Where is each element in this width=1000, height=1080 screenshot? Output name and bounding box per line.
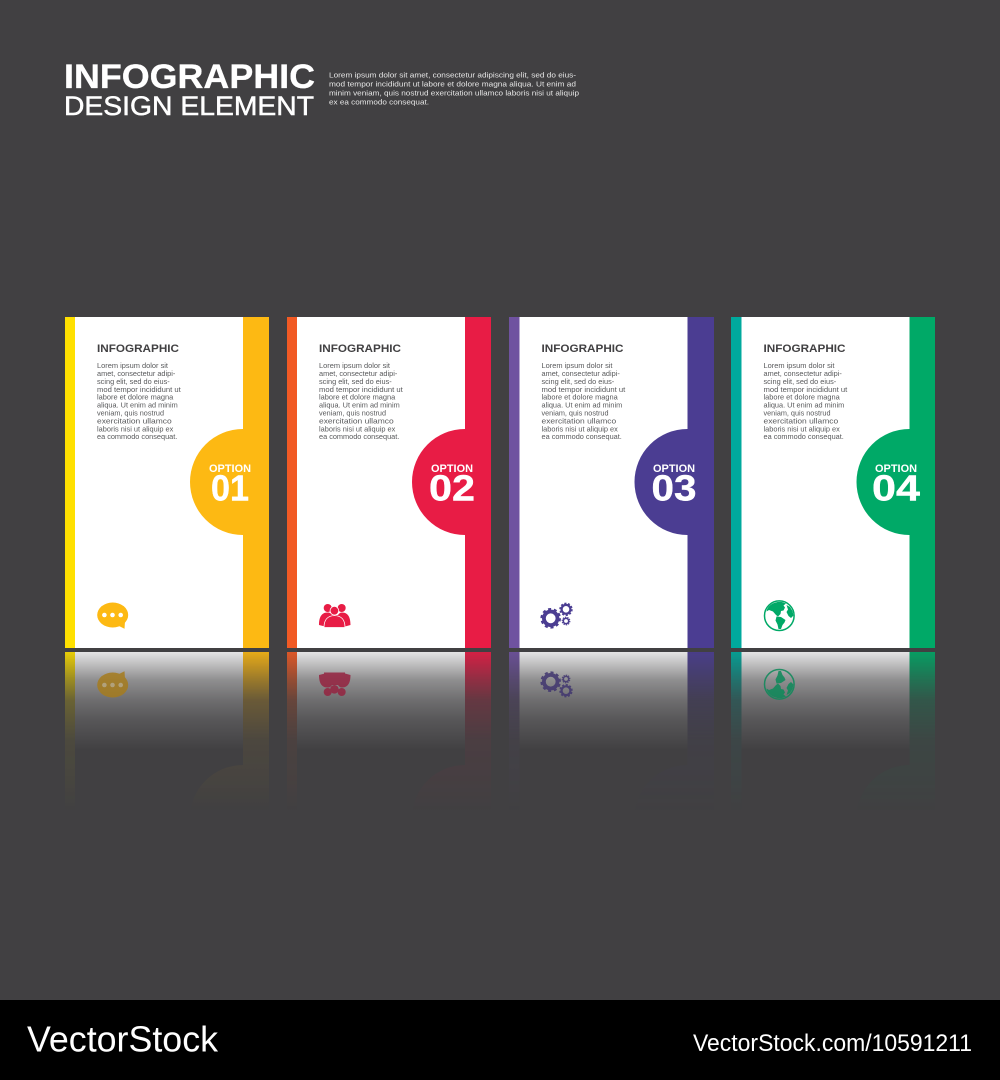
badge: option 02 — [412, 429, 475, 535]
text block: exercitation ullamco — [97, 417, 172, 425]
heading: INFOGRAPHIC — [764, 343, 846, 355]
text block: laboris nisi ut aliquip ex — [319, 425, 396, 433]
icon: globe — [764, 601, 794, 630]
icon: gears — [541, 603, 572, 628]
text block: laboris nisi ut aliquip ex — [542, 425, 618, 433]
text block: mod tempor incididunt ut — [764, 386, 847, 394]
reflections — [65, 652, 935, 758]
intro text block — [329, 70, 579, 106]
text block: aliqua. Ut enim ad minim — [542, 402, 622, 410]
badge: option 04: OPTION — [875, 463, 917, 475]
reflection: option 01 — [65, 652, 269, 758]
heading: INFOGRAPHIC — [97, 343, 179, 355]
text block: veniam, quis nostrud — [319, 410, 386, 418]
heading: INFOGRAPHIC — [542, 343, 624, 355]
title — [64, 58, 315, 121]
text block: aliqua. Ut enim ad minim — [764, 402, 844, 410]
reflection: option 02 — [287, 652, 491, 752]
text block: scing elit, sed do eius- — [97, 378, 170, 386]
text block: aliqua. Ut enim ad minim — [319, 402, 400, 410]
reflected globe — [764, 670, 794, 699]
text block: Lorem ipsum dolor sit — [542, 362, 613, 370]
text block: ea commodo consequat. — [319, 433, 399, 441]
intro text block: Lorem ipsum dolor sit amet, consectetur adipiscing elit, sed do eius- — [329, 70, 577, 80]
text block: veniam, quis nostrud — [542, 410, 609, 418]
badge: option 01: OPTION — [209, 463, 251, 475]
reflected people group — [319, 672, 350, 696]
panel: option 02 — [287, 317, 491, 648]
text block — [97, 362, 181, 441]
reflection: white floor sheen — [75, 652, 910, 752]
panel: option 01 — [65, 317, 269, 648]
intro text block: mod tempor incididunt ut labore et dolore magna aliqua. Ut enim ad — [329, 80, 576, 88]
text block: laboris nisi ut aliquip ex — [97, 425, 174, 433]
text block: scing elit, sed do eius- — [764, 378, 837, 386]
text block: Lorem ipsum dolor sit — [97, 362, 168, 370]
icon: people group — [319, 604, 350, 628]
text block: ea commodo consequat. — [764, 433, 844, 441]
text block: amet, consectetur adipi- — [97, 370, 176, 378]
text block: Lorem ipsum dolor sit — [319, 362, 390, 370]
text block: exercitation ullamco — [542, 417, 616, 425]
badge: option 01 — [190, 429, 251, 535]
reflection: option 03 — [509, 652, 714, 731]
text block: exercitation ullamco — [319, 417, 394, 425]
title: INFOGRAPHIC — [64, 58, 315, 96]
title: DESIGN ELEMENT — [64, 91, 314, 121]
badge: option 03: 03 — [652, 468, 696, 508]
text block: laboris nisi ut aliquip ex — [764, 425, 840, 433]
text block: mod tempor incididunt ut — [319, 386, 403, 394]
reflected gears — [541, 672, 572, 697]
text block: scing elit, sed do eius- — [542, 378, 615, 386]
text block: labore et dolore magna — [97, 394, 173, 402]
badge: option 04 — [856, 429, 920, 535]
panel: option 04 — [731, 317, 935, 648]
panel: option 03 — [509, 317, 714, 648]
intro text block: ex ea commodo consequat. — [329, 98, 429, 106]
text block: exercitation ullamco — [764, 417, 838, 425]
text block: veniam, quis nostrud — [97, 410, 164, 418]
text block: mod tempor incididunt ut — [542, 386, 625, 394]
text block — [542, 362, 625, 441]
reflection: option 04 — [731, 652, 935, 734]
intro text block: minim veniam, quis nostrud exercitation ullamco laboris nisi ut aliquip — [329, 88, 579, 98]
badge: option 01: 01 — [211, 468, 249, 508]
icon: speech bubble — [97, 602, 128, 629]
text block: amet, consectetur adipi- — [542, 370, 620, 378]
text block: aliqua. Ut enim ad minim — [97, 402, 178, 410]
footer brand: VectorStock — [27, 1018, 219, 1060]
heading: INFOGRAPHIC — [319, 343, 401, 355]
badge: option 02: OPTION — [431, 463, 473, 475]
badge: option 02: 02 — [429, 468, 475, 508]
text block: amet, consectetur adipi- — [764, 370, 842, 378]
text block: labore et dolore magna — [542, 394, 618, 402]
text block: amet, consectetur adipi- — [319, 370, 398, 378]
footer band — [0, 1000, 1000, 1080]
reflected speech bubble — [97, 671, 128, 698]
text block — [764, 362, 847, 441]
reflected icons — [97, 670, 794, 699]
footer url: VectorStock.com/10591211 — [693, 1030, 972, 1057]
text block: labore et dolore magna — [764, 394, 840, 402]
text block: ea commodo consequat. — [97, 433, 177, 441]
text block: veniam, quis nostrud — [764, 410, 831, 418]
text block: labore et dolore magna — [319, 394, 395, 402]
text block — [319, 362, 403, 441]
text block: Lorem ipsum dolor sit — [764, 362, 835, 370]
text block: scing elit, sed do eius- — [319, 378, 392, 386]
badge: option 03: OPTION — [653, 463, 695, 475]
text block: mod tempor incididunt ut — [97, 386, 181, 394]
badge: option 04: 04 — [872, 468, 920, 508]
badge: option 03 — [635, 429, 696, 535]
text block: ea commodo consequat. — [542, 433, 622, 441]
